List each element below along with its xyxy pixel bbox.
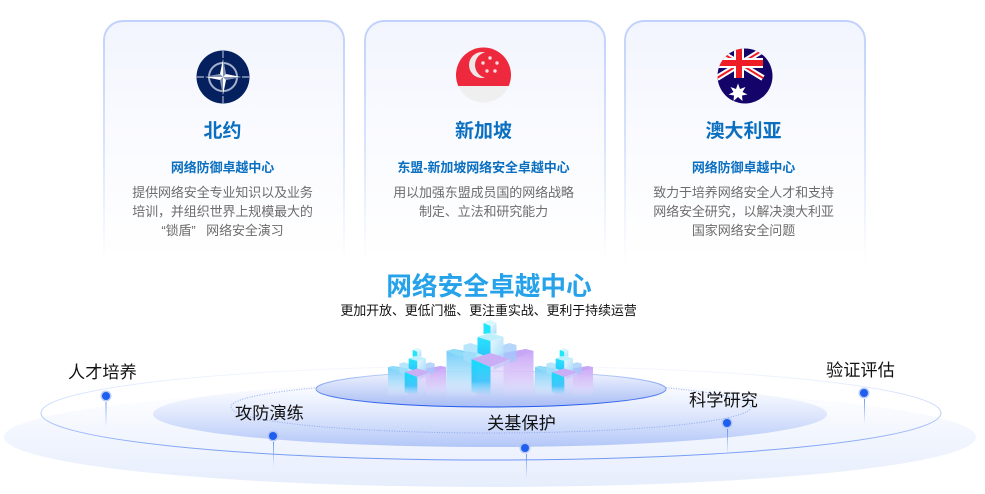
- label: 关基保护: 关基保护: [487, 413, 556, 433]
- building: center tower: [446, 320, 534, 398]
- subheading: 网络防御卓越中心: [171, 160, 274, 175]
- heading: 北约: 北约: [203, 121, 242, 142]
- description: 用以加强东盟成员国的网络战略: [393, 185, 574, 200]
- description: 致力于培养网络安全人才和支持: [653, 185, 834, 200]
- building: left tower: [388, 348, 446, 396]
- pin: 验证评估: [858, 388, 870, 424]
- label: 攻防演练: 攻防演练: [235, 403, 304, 423]
- panel: Singapore card: [364, 20, 606, 238]
- description: [393, 185, 574, 219]
- pin: 科学研究: [722, 418, 732, 454]
- subheading: 东盟-新加坡网络安全卓越中心: [397, 160, 570, 175]
- icon: NATO flag: [196, 50, 250, 104]
- panel: Australia card: [624, 20, 866, 238]
- description: 制定、立法和研究能力: [419, 204, 548, 219]
- building: right tower: [535, 348, 593, 396]
- description: 网络安全研究，以解决澳大利亚: [653, 204, 834, 219]
- pin: 攻防演练: [268, 430, 278, 467]
- description: 提供网络安全专业知识以及业务: [132, 185, 313, 200]
- panel: NATO card: [102, 20, 344, 264]
- subheading: 网络防御卓越中心: [692, 160, 795, 175]
- main title: 网络安全卓越中心: [386, 273, 592, 301]
- pin: 关基保护: [520, 442, 530, 479]
- dotted ring: [231, 381, 751, 433]
- label: 人才培养: 人才培养: [68, 362, 137, 382]
- middle disc: [153, 381, 827, 447]
- description: [653, 185, 834, 238]
- icon: Singapore flag: [456, 48, 511, 102]
- description: [132, 185, 313, 238]
- label: 验证评估: 验证评估: [826, 360, 895, 380]
- description: 培训，并组织世界上规模最大的: [132, 204, 313, 219]
- description: 国家网络安全问题: [692, 223, 795, 238]
- label: 科学研究: 科学研究: [689, 390, 758, 410]
- outer ring: [41, 366, 941, 460]
- pin: 人才培养: [100, 390, 112, 427]
- top platform disc: [316, 371, 666, 407]
- description: “锁盾” 网络安全演习: [161, 223, 284, 238]
- heading: 澳大利亚: 澳大利亚: [705, 121, 782, 142]
- heading: 新加坡: 新加坡: [455, 121, 512, 142]
- subtitle: 更加开放、更低门槛、更注重实战、更利于持续运营: [340, 303, 637, 318]
- base ellipse: [4, 387, 976, 487]
- icon: Australia flag: [718, 48, 772, 104]
